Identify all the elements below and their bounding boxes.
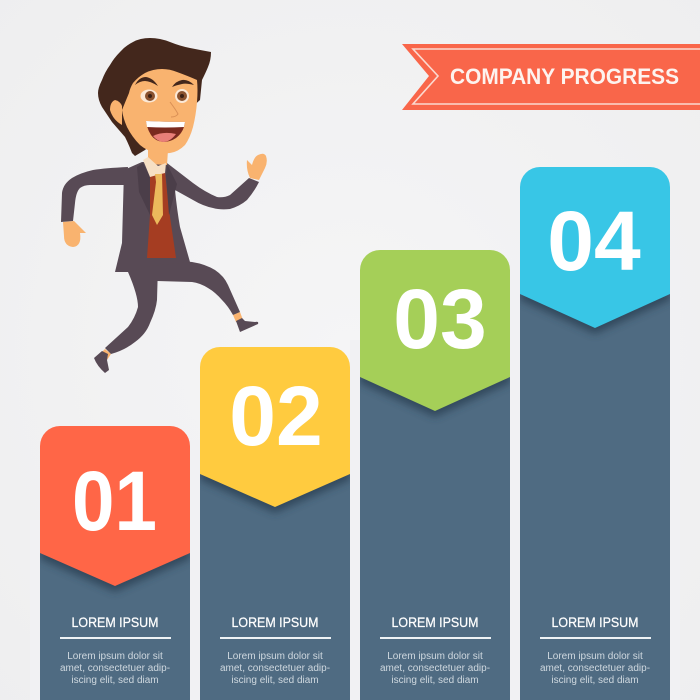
heading 03: LOREM IPSUM [392,615,478,630]
neck [148,148,168,165]
heading 01: LOREM IPSUM [72,615,158,630]
heading 04: LOREM IPSUM [552,615,638,630]
ear [110,100,122,125]
marker 01 [40,426,190,586]
text 02: amet, consectetuer adip- [220,663,330,674]
front leg [150,258,240,315]
marker 04 [520,167,670,328]
vest [147,172,176,258]
text 03: amet, consectetuer adip- [380,663,490,674]
nose [170,102,178,117]
number 01: 01 [72,454,157,548]
text 02: iscing elit, sed diam [231,675,319,686]
text 01: iscing elit, sed diam [71,675,159,686]
column 02 [190,347,360,700]
text 01: amet, consectetuer adip- [60,663,170,674]
marker 03 [360,250,510,411]
number 03: 03 [393,272,487,366]
hair [98,38,211,156]
rear arm [61,167,128,222]
banner title: COMPANY PROGRESS [450,64,679,89]
number 04: 04 [547,194,641,288]
text 04: amet, consectetuer adip- [540,663,650,674]
forward arm [167,163,259,209]
left eyebrow [135,77,158,86]
column 04 [510,167,680,700]
right lapel [166,164,177,215]
left lapel [137,163,150,215]
column 01 [30,426,200,700]
column 03 [350,250,520,700]
heading 02: LOREM IPSUM [232,615,318,630]
mouth [146,121,185,142]
front sock and shoe [233,312,243,322]
back leg [105,265,158,354]
text 02: Lorem ipsum dolor sit [227,651,323,662]
text 03: iscing elit, sed diam [391,675,479,686]
illustration: running businessman [61,38,267,373]
marker 02 [200,347,350,507]
jacket [115,162,190,272]
rear hand [63,221,86,247]
text 04: Lorem ipsum dolor sit [547,651,643,662]
text 03: Lorem ipsum dolor sit [387,651,483,662]
raised hand [247,154,267,180]
collar [143,157,166,177]
number 02: 02 [229,369,323,463]
banner: company progress [402,44,700,110]
back sock and shoe [100,349,111,360]
tie [152,174,163,225]
text 01: Lorem ipsum dolor sit [67,651,163,662]
face [122,69,198,153]
text 04: iscing elit, sed diam [551,675,639,686]
eyes [140,90,158,102]
right eyebrow [172,80,194,87]
